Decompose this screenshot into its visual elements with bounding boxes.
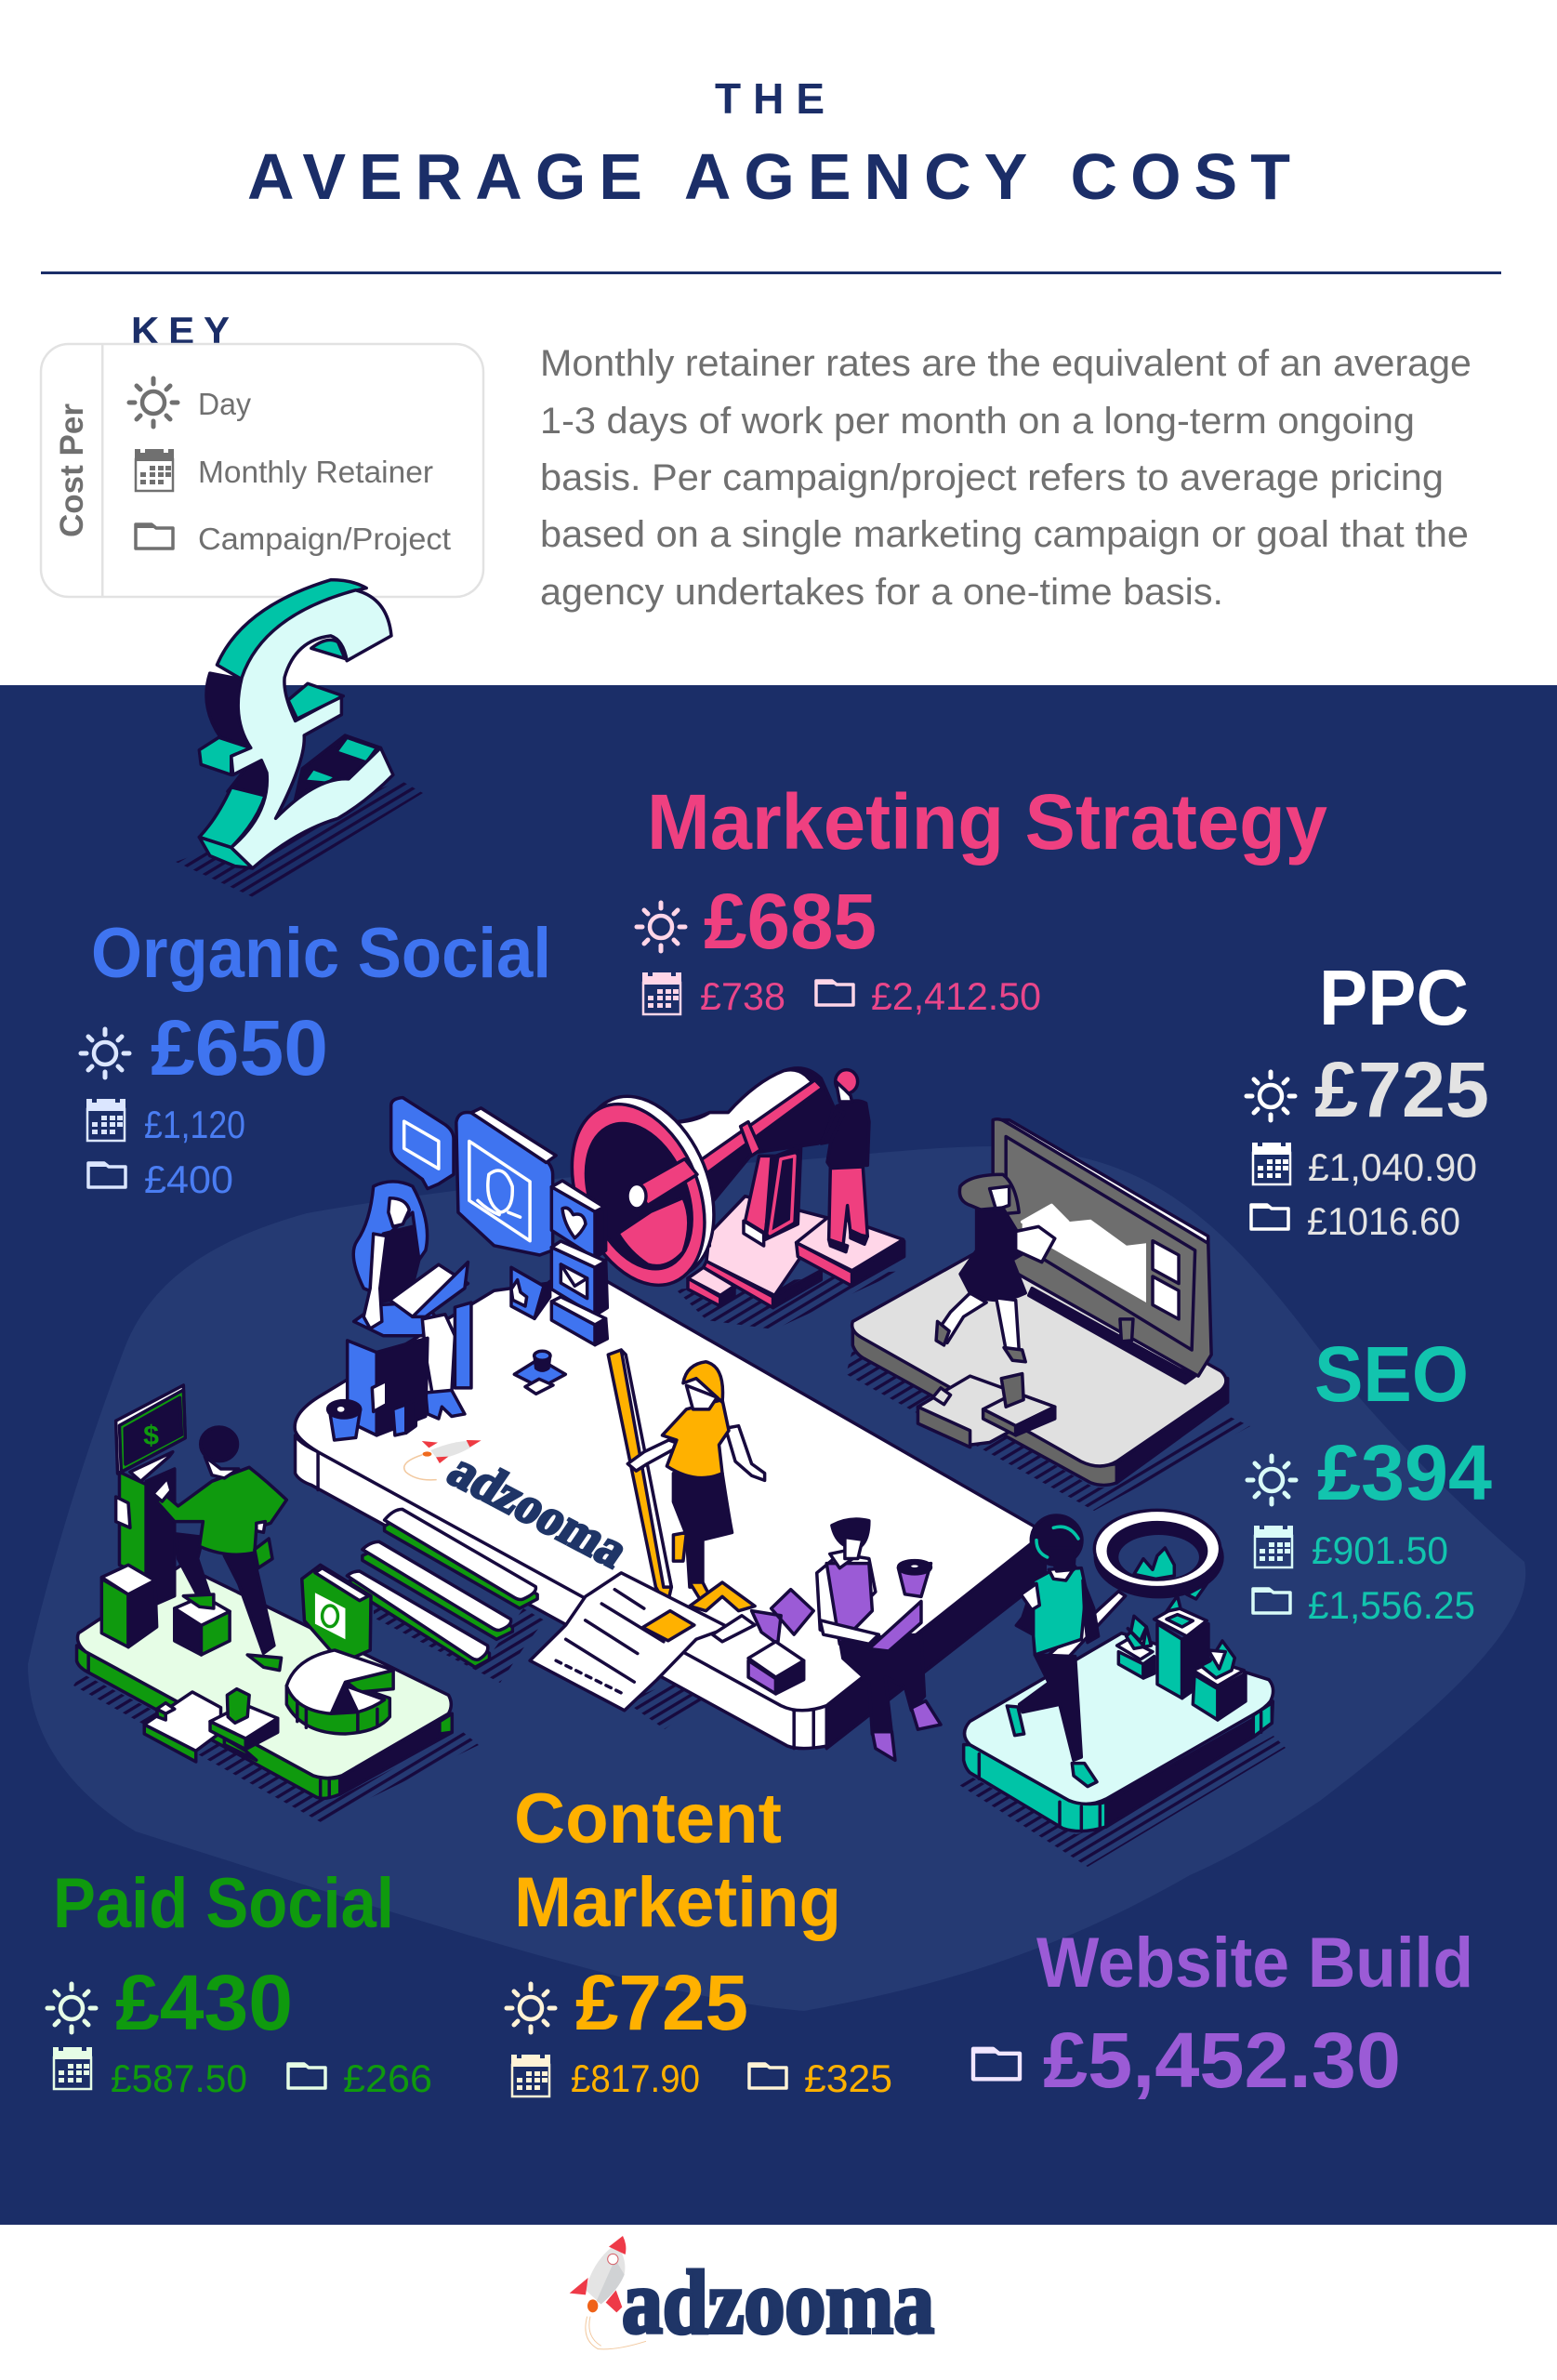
day price: £725 [1314,1046,1489,1133]
logo on platform: adzooma [438,1442,639,1579]
title: AVERAGE AGENCY COST [247,140,1290,213]
day icon [47,1984,96,2032]
project icon [287,2063,325,2088]
day icon [81,1029,129,1078]
kiosk [119,1472,146,1578]
tower [1157,1624,1182,1699]
illustration: social tiles [511,1181,607,1394]
illustration: gray platform with board [852,1119,1228,1485]
retainer price: £587.50 [111,2056,247,2100]
day icon [1247,1072,1295,1120]
stage side [964,1745,1106,1831]
project price: £400 [144,1157,233,1201]
key box [41,344,483,597]
project icon [972,2047,1020,2079]
illustration: organic social figure and tiles [328,1098,556,1440]
retainer price: £738 [700,974,785,1018]
day price: £685 [704,878,877,965]
day price: £650 [151,1004,328,1091]
man at megaphone [829,1167,867,1249]
pencil [608,1350,671,1607]
content marketing block [507,1779,892,2100]
cost per label: Cost Per [54,403,90,537]
illustration: paid social stage [77,1385,537,1799]
retainer price: £1,120 [144,1103,245,1146]
woman with laptop [353,1182,428,1298]
day icon [1247,1456,1296,1504]
key labels [198,387,451,556]
heading: SEO [1314,1330,1469,1418]
hatched shadows [73,781,1286,1867]
heading: Website Build [1036,1924,1473,2003]
illustration: megaphone with pink stage and man [547,1068,904,1308]
marketing strategy block [637,778,1327,1018]
small steps [144,1725,196,1762]
wordmark: adzooma [622,2253,934,2352]
project icon [1250,1204,1288,1229]
key heading: KEY [131,309,230,352]
seo block [1247,1330,1492,1627]
thumb tile [534,1281,550,1318]
heading: PPC [1319,954,1469,1041]
mini rocket [430,1441,479,1460]
icon: sun [129,378,178,427]
man at kiosk [224,1553,274,1653]
dollar label: $ [143,1421,159,1451]
project icon [87,1162,125,1187]
illustration: white main platform [295,1276,1045,1749]
project icon [815,980,853,1005]
small marker [514,1359,565,1388]
day price: £394 [1317,1429,1492,1516]
intro paragraph: 1-3 days of work per month on a long-term ongoing [540,401,1415,442]
navy panel [0,685,1557,2225]
platform underside [826,1532,1045,1749]
project price: £1,556.25 [1308,1583,1475,1627]
day icon [637,903,685,951]
project price: £325 [804,2056,892,2100]
project icon [748,2063,786,2088]
retainer icon [511,2055,550,2096]
speech bubble small [391,1098,454,1189]
platform side [296,1435,826,1749]
organic social block [81,914,551,1201]
intro paragraph: agency undertakes for a one-time basis. [540,572,1223,613]
rocket [570,2236,646,2349]
handle [1048,1592,1126,1667]
retainer icon [1252,1143,1291,1184]
key labels: Monthly Retainer [198,455,433,489]
heading: Content [514,1779,782,1858]
heart tile [595,1209,606,1258]
retainer icon [642,972,681,1014]
heading: Paid Social [53,1864,394,1943]
stage top [964,1633,1273,1804]
title [247,74,1290,213]
stage side [77,1646,340,1798]
ppc block [1247,954,1489,1243]
third tile [595,1318,607,1345]
heading: Marketing Strategy [647,778,1327,866]
intro paragraph: based on a single marketing campaign or goal that the [540,514,1469,555]
project price: £1016.60 [1307,1199,1460,1243]
magnifier [1095,1517,1222,1597]
woman at board [959,1174,1019,1215]
retainer price: £1,040.90 [1308,1145,1477,1189]
man with laptop [839,1634,924,1734]
stage top [77,1565,451,1778]
heading second line: Marketing [514,1863,841,1942]
retainer icon [86,1099,125,1141]
icon: calendar [135,449,174,491]
pie chart [286,1683,389,1734]
heading: Organic Social [91,914,551,993]
project price: £2,412.50 [871,974,1041,1018]
project icon [1252,1588,1290,1613]
retainer icon [1254,1526,1293,1567]
illustration: website build stage [964,1510,1273,1831]
left pot [1118,1652,1143,1678]
intro paragraph: basis. Per campaign/project refers to average pricing [540,457,1444,498]
runner [1020,1655,1081,1760]
illustration: steps, paper, writer, man with laptop [530,1350,941,1760]
key labels: Campaign/Project [198,522,451,556]
plant pot [752,1590,813,1644]
speech bubble large [456,1113,553,1255]
retainer price: £817.90 [571,2056,700,2100]
intro paragraph [540,343,1471,613]
title: THE [715,74,825,123]
platform top [295,1276,1045,1711]
project price: £266 [343,2056,432,2100]
bubble phone [302,1565,371,1661]
intro paragraph: Monthly retainer rates are the equivalent of an average [540,343,1471,384]
steps [347,1509,537,1667]
day price: £430 [115,1959,293,2046]
icon: folder [135,523,173,549]
woman with pencil [726,1426,765,1480]
key panel [41,309,483,597]
project price: £5,452.30 [1043,2016,1401,2104]
retainer icon [53,2047,92,2089]
box left [101,1579,128,1647]
key labels: Day [198,387,251,421]
day icon [507,1984,555,2032]
website build block [972,1924,1473,2104]
paid social block [47,1864,432,2100]
paper [530,1573,729,1711]
envelope tile [595,1260,607,1316]
cube [175,1608,201,1655]
retainer price: £901.50 [1312,1528,1448,1572]
day price: £725 [575,1959,748,2046]
background blob [28,1146,1525,2011]
cup [330,1409,361,1440]
blue box seat [348,1341,376,1435]
right pot [1193,1675,1218,1720]
footer logo [570,2236,934,2352]
icon: pound sign [199,580,393,868]
